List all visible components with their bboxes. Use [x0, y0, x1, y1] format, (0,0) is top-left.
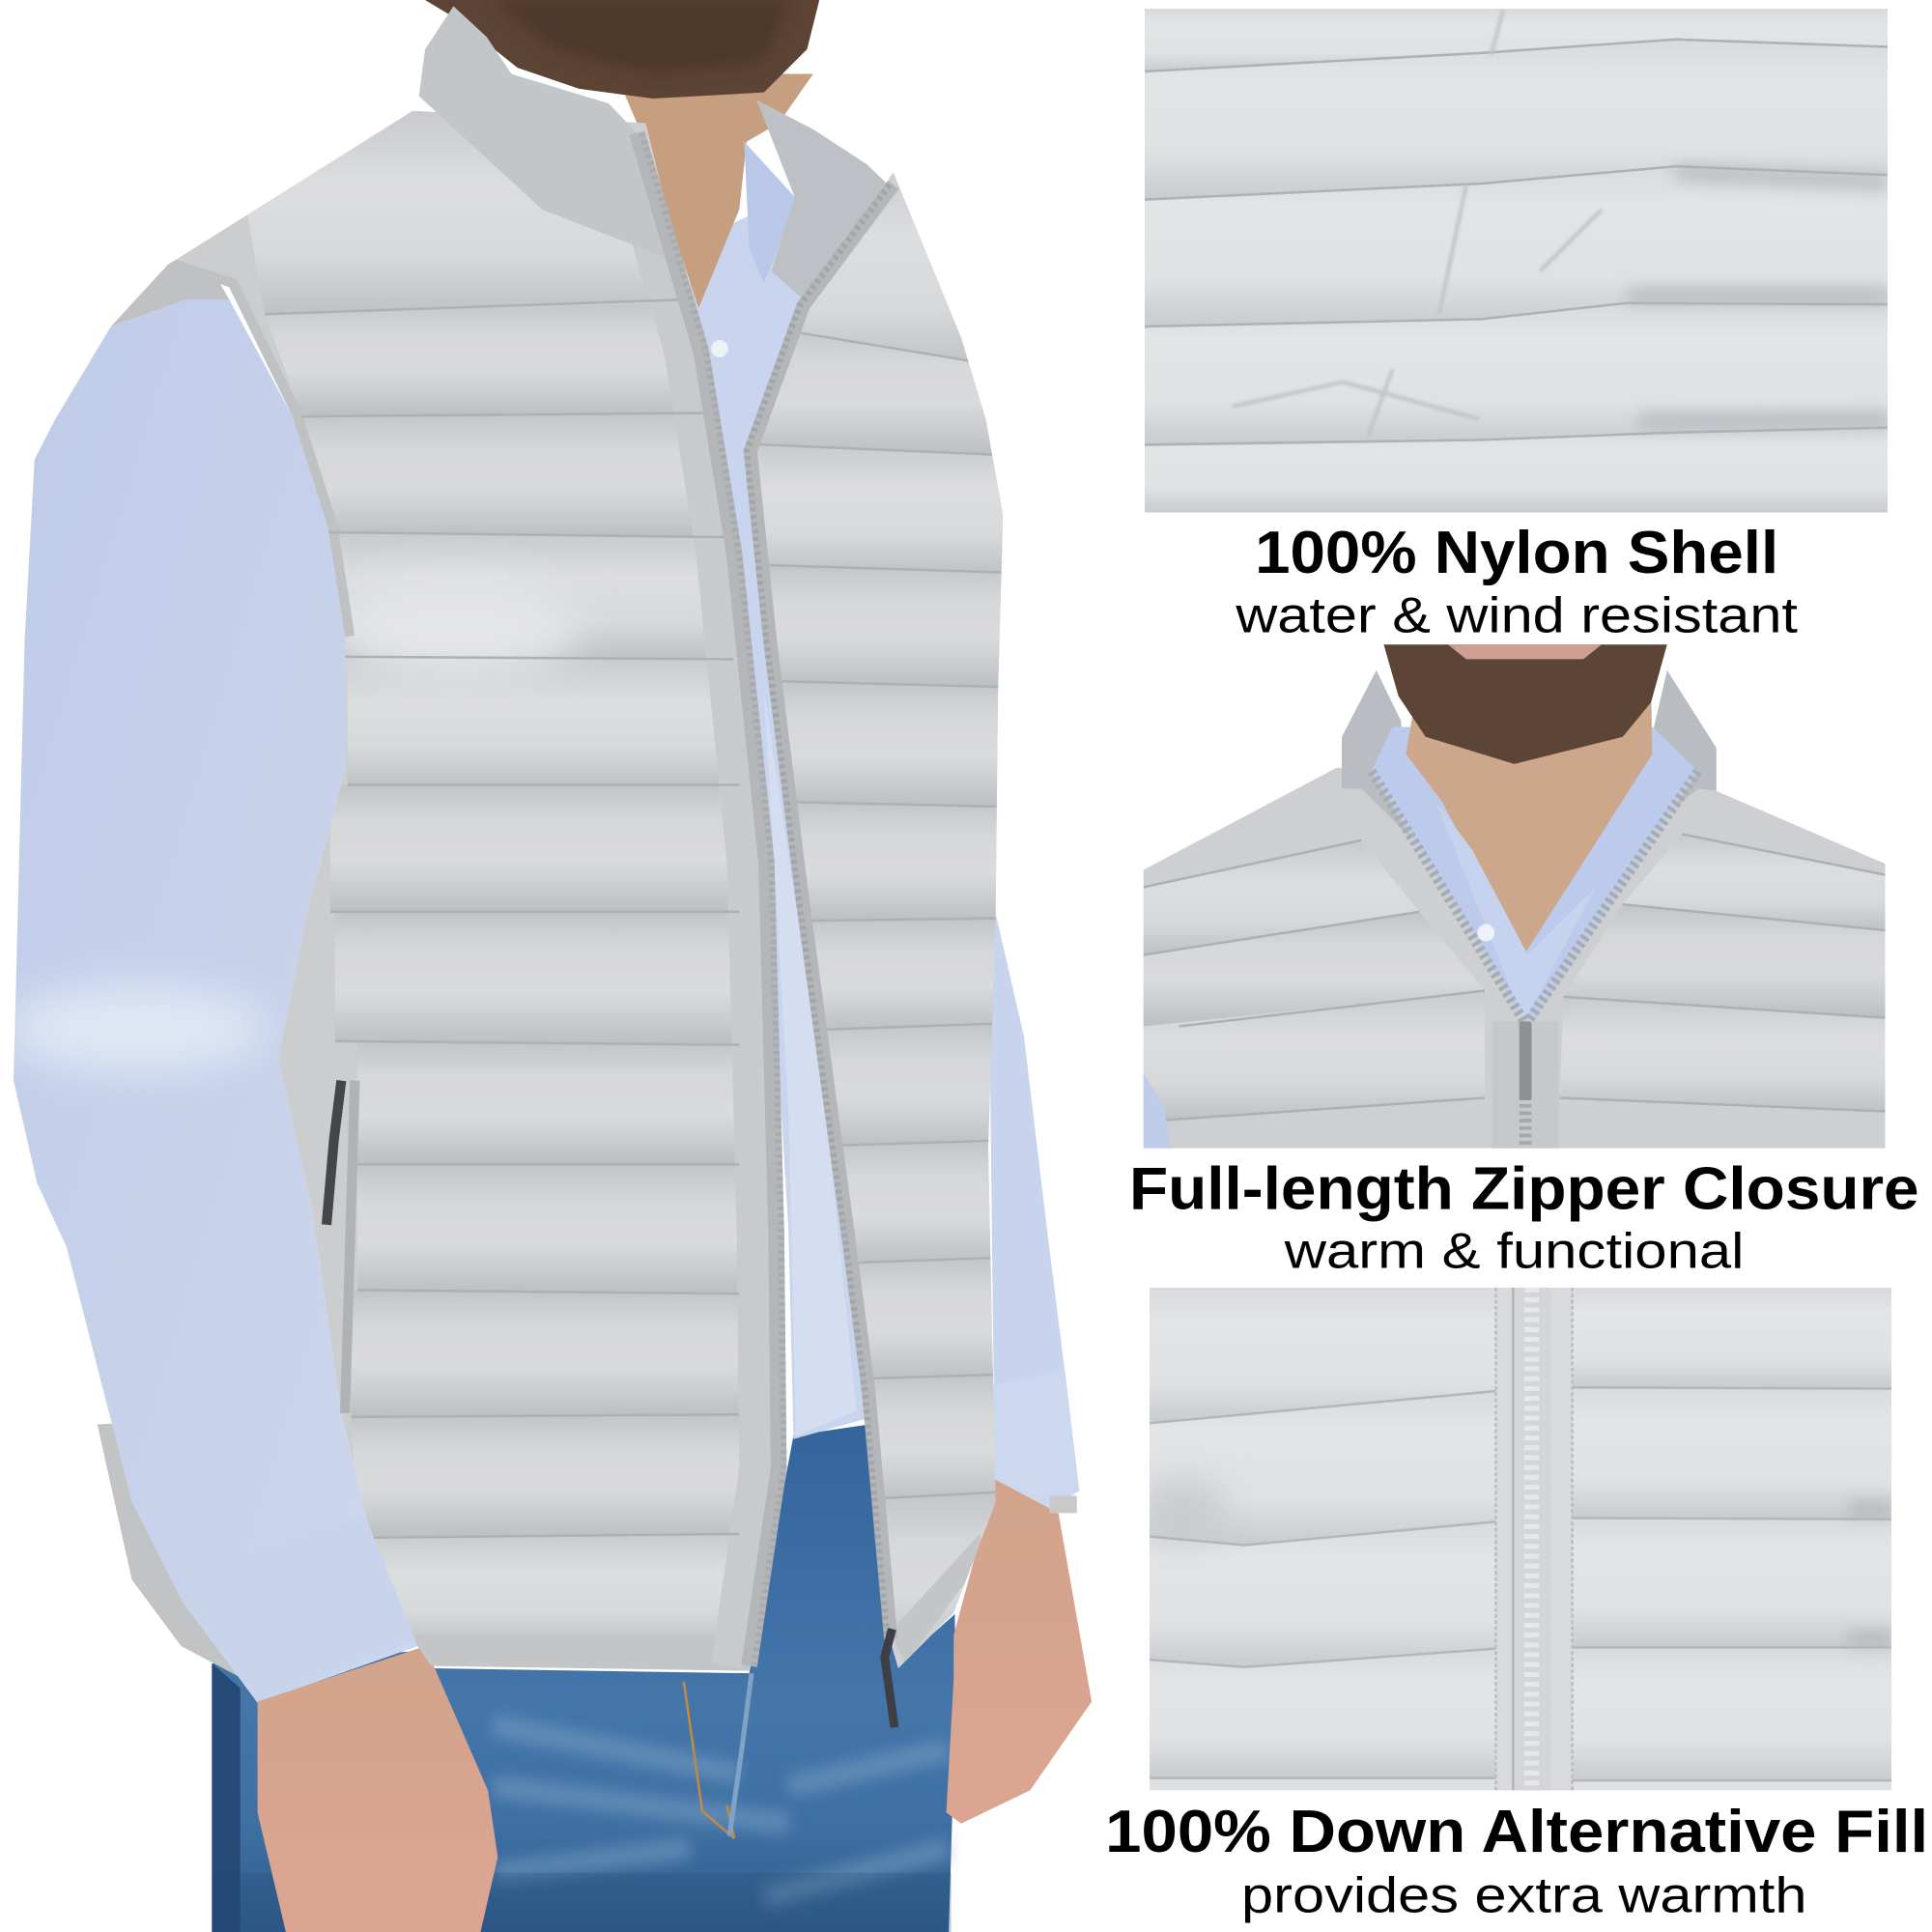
left hand: [258, 1646, 497, 1932]
caption: down alternative fill: [1105, 1798, 1928, 1924]
main photo: man wearing vest: [0, 0, 1092, 1932]
pocket zipper: [327, 1081, 355, 1413]
main zipper pull: [885, 1629, 895, 1727]
caption: nylon shell: 100% Nylon Shell: [1255, 519, 1778, 586]
caption: zipper closure: warm & functional: [1284, 1223, 1744, 1279]
left collar: [419, 6, 666, 258]
right vest panel: [757, 172, 1003, 1668]
shoulder band behind sleeve: [111, 265, 229, 327]
detail photo: nylon shell: [1145, 9, 1888, 513]
caption: zipper closure: Full-length Zipper Closure: [1129, 1154, 1919, 1222]
detail photo: zipper closure: [1144, 644, 1886, 1149]
left vest panel: [168, 110, 771, 1671]
caption: nylon shell: water & wind resistant: [1235, 587, 1799, 643]
right zipper: [747, 185, 894, 1638]
left zipper: [637, 133, 783, 1665]
left sleeve: [0, 283, 431, 1713]
right collar: [756, 99, 894, 299]
caption: down alternative fill: provides extra warmth: [1241, 1868, 1807, 1924]
caption: down alternative fill: 100% Down Alternative Fill: [1105, 1798, 1928, 1865]
beard: [425, 0, 819, 99]
neck: [616, 74, 813, 308]
detail photo: down alternative fill: [1140, 1288, 1891, 1790]
right hand: [947, 1480, 1092, 1824]
watch: [1050, 1495, 1077, 1513]
right sleeve: [988, 881, 1079, 1540]
caption: nylon shell: [1235, 519, 1799, 643]
jeans: [212, 1424, 955, 1932]
caption: zipper closure: [1129, 1154, 1919, 1279]
shirt front: [684, 197, 872, 1439]
back of vest at lower left: [98, 1417, 308, 1680]
shirt collar: [744, 142, 797, 283]
